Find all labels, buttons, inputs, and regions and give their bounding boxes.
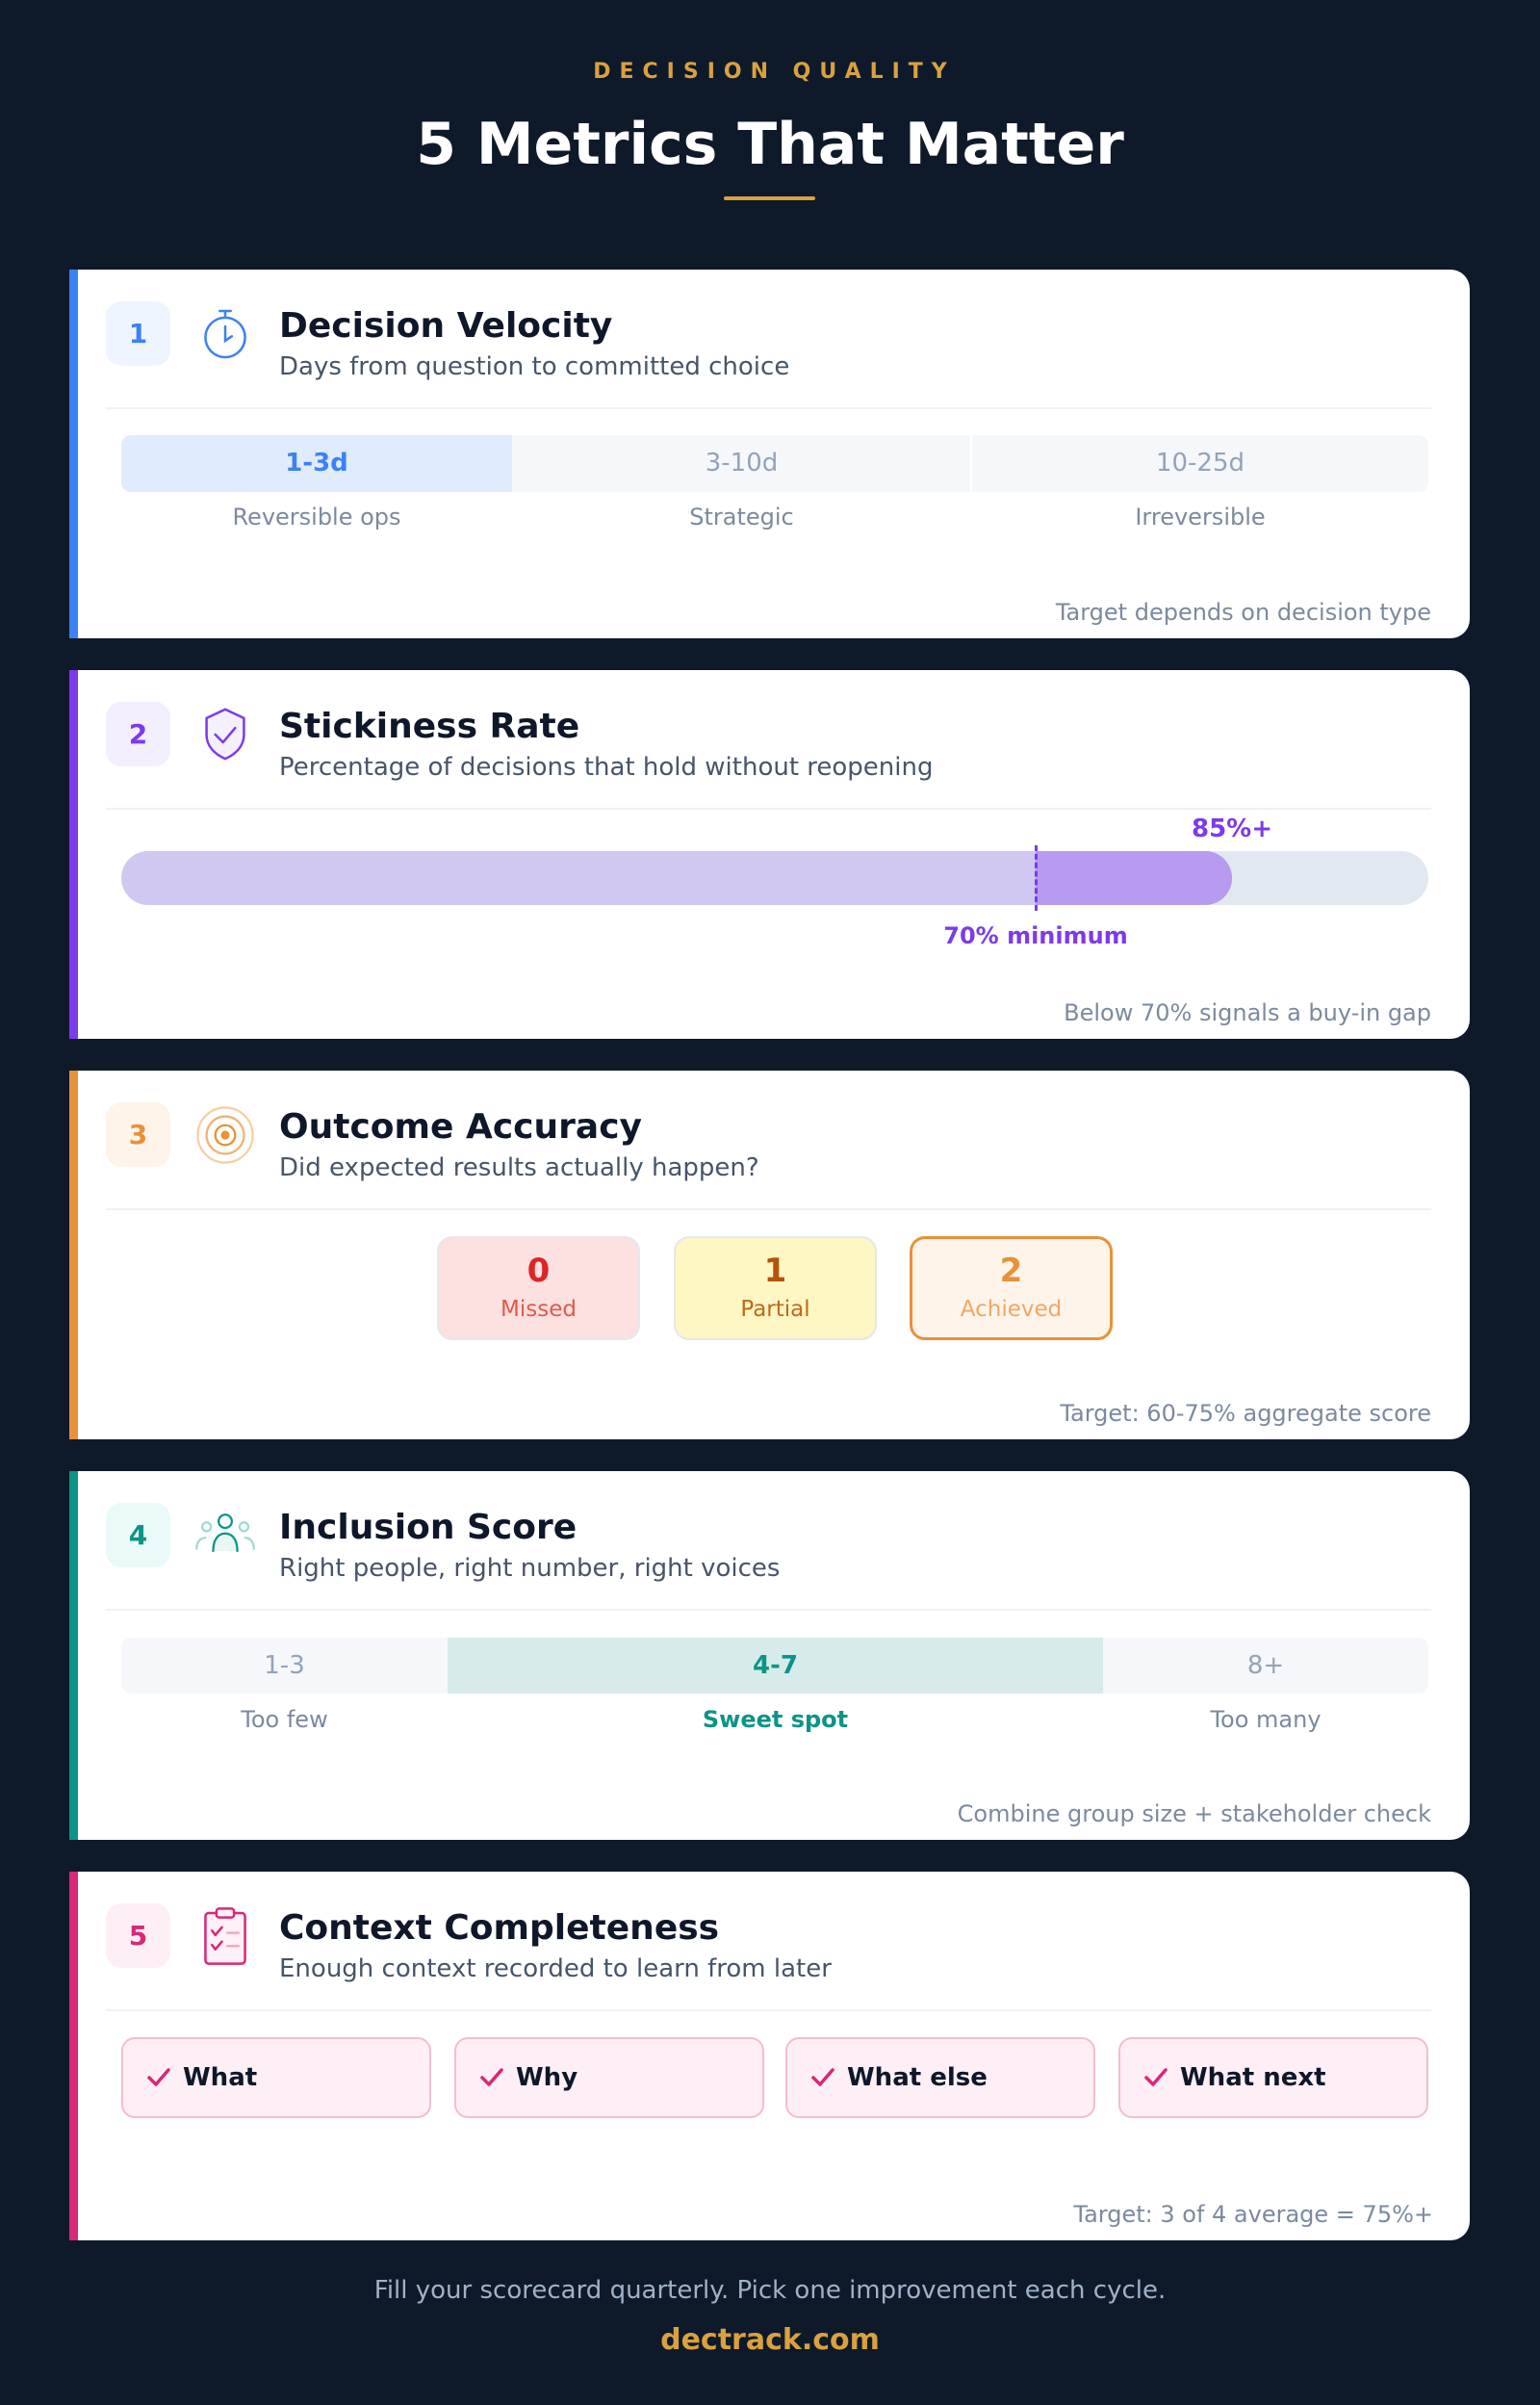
badge 4: 4	[129, 1519, 147, 1551]
footer brand: dectrack.com	[660, 2323, 880, 2357]
label 85%+: 85%+	[1192, 815, 1272, 843]
heading: Decision Velocity	[279, 306, 612, 346]
item: what next	[1118, 2037, 1428, 2118]
badge 4	[106, 1503, 170, 1567]
item: why	[454, 2037, 764, 2118]
subtitle: Days from question to committed choice	[279, 352, 789, 381]
badge 1	[106, 301, 170, 366]
subtitle: Enough context recorded to learn from later	[279, 1954, 832, 1983]
heading: Stickiness Rate	[279, 707, 579, 746]
panel: context completeness	[69, 1872, 1470, 2240]
heading: Context Completeness	[279, 1908, 719, 1948]
icon: shield check	[205, 709, 245, 761]
group size scale: Too few	[241, 1706, 328, 1733]
icon: clipboard	[204, 1907, 246, 1965]
icon: stopwatch	[204, 310, 246, 358]
heading: Inclusion Score	[279, 1508, 577, 1547]
footnote: Target: 60-75% aggregate score	[1060, 1400, 1431, 1427]
icon: target	[196, 1106, 254, 1164]
segment scale: Reversible ops	[232, 504, 401, 530]
checklist items	[121, 2037, 1428, 2118]
group size scale: 8+	[1247, 1651, 1284, 1680]
score boxes	[437, 1236, 1113, 1340]
box: partial: Partial	[740, 1297, 810, 1322]
box: achieved: Achieved	[961, 1297, 1062, 1322]
icon: people	[195, 1513, 255, 1552]
box: missed: Missed	[500, 1297, 577, 1322]
badge 3: 3	[129, 1119, 147, 1151]
item: what else: What else	[847, 2063, 988, 2092]
segment scale: 1-3d	[285, 449, 348, 478]
segment scale: Irreversible	[1135, 504, 1266, 530]
footnote: Target depends on decision type	[1056, 599, 1431, 626]
box: missed	[437, 1236, 640, 1340]
box: achieved: 2	[1000, 1252, 1022, 1290]
subtitle: Did expected results actually happen?	[279, 1153, 759, 1182]
subtitle: Percentage of decisions that hold without reopening	[279, 753, 934, 782]
group size scale: Sweet spot	[703, 1706, 848, 1733]
segment scale: 10-25d	[1156, 449, 1245, 478]
footnote: Combine group size + stakeholder check	[958, 1800, 1431, 1827]
box: achieved	[910, 1236, 1113, 1340]
group size scale: 4-7	[753, 1651, 798, 1680]
group size scale: Too many	[1210, 1706, 1322, 1733]
segment scale	[121, 435, 1428, 530]
footer text: Fill your scorecard quarterly. Pick one improvement each cycle.	[374, 2276, 1166, 2305]
footnote: Below 70% signals a buy-in gap	[1064, 999, 1431, 1026]
footnote: Target: 3 of 4 average = 75%+	[1073, 2201, 1433, 2228]
panel: stickiness rate	[69, 670, 1470, 1039]
panel: decision velocity	[69, 270, 1470, 638]
title: 5 Metrics That Matter	[416, 111, 1124, 178]
heading: Outcome Accuracy	[279, 1107, 642, 1147]
badge 1: 1	[129, 318, 147, 349]
segment scale: Strategic	[689, 504, 794, 530]
box: partial	[674, 1236, 877, 1340]
group size scale: 1-3	[264, 1651, 305, 1680]
subtitle: Right people, right number, right voices	[279, 1554, 780, 1583]
badge 3	[106, 1102, 170, 1167]
panel: inclusion score	[69, 1471, 1470, 1840]
eyebrow: decision quality: DECISION QUALITY	[593, 60, 956, 84]
box: missed: 0	[527, 1252, 550, 1290]
box: partial: 1	[764, 1252, 786, 1290]
badge 5: 5	[129, 1920, 147, 1952]
progress bar	[121, 815, 1428, 949]
badge 5	[106, 1903, 170, 1968]
badge 2	[106, 702, 170, 766]
item: what	[121, 2037, 431, 2118]
item: why: Why	[516, 2063, 578, 2092]
item: what next: What next	[1180, 2063, 1326, 2092]
item: what: What	[183, 2063, 257, 2092]
segment scale: 3-10d	[706, 449, 778, 478]
group size scale	[121, 1638, 1428, 1733]
panel: outcome accuracy	[69, 1071, 1470, 1439]
title underline	[724, 196, 815, 200]
label 70% minimum: 70% minimum	[943, 922, 1128, 949]
item: what else	[785, 2037, 1095, 2118]
badge 2: 2	[129, 718, 147, 750]
